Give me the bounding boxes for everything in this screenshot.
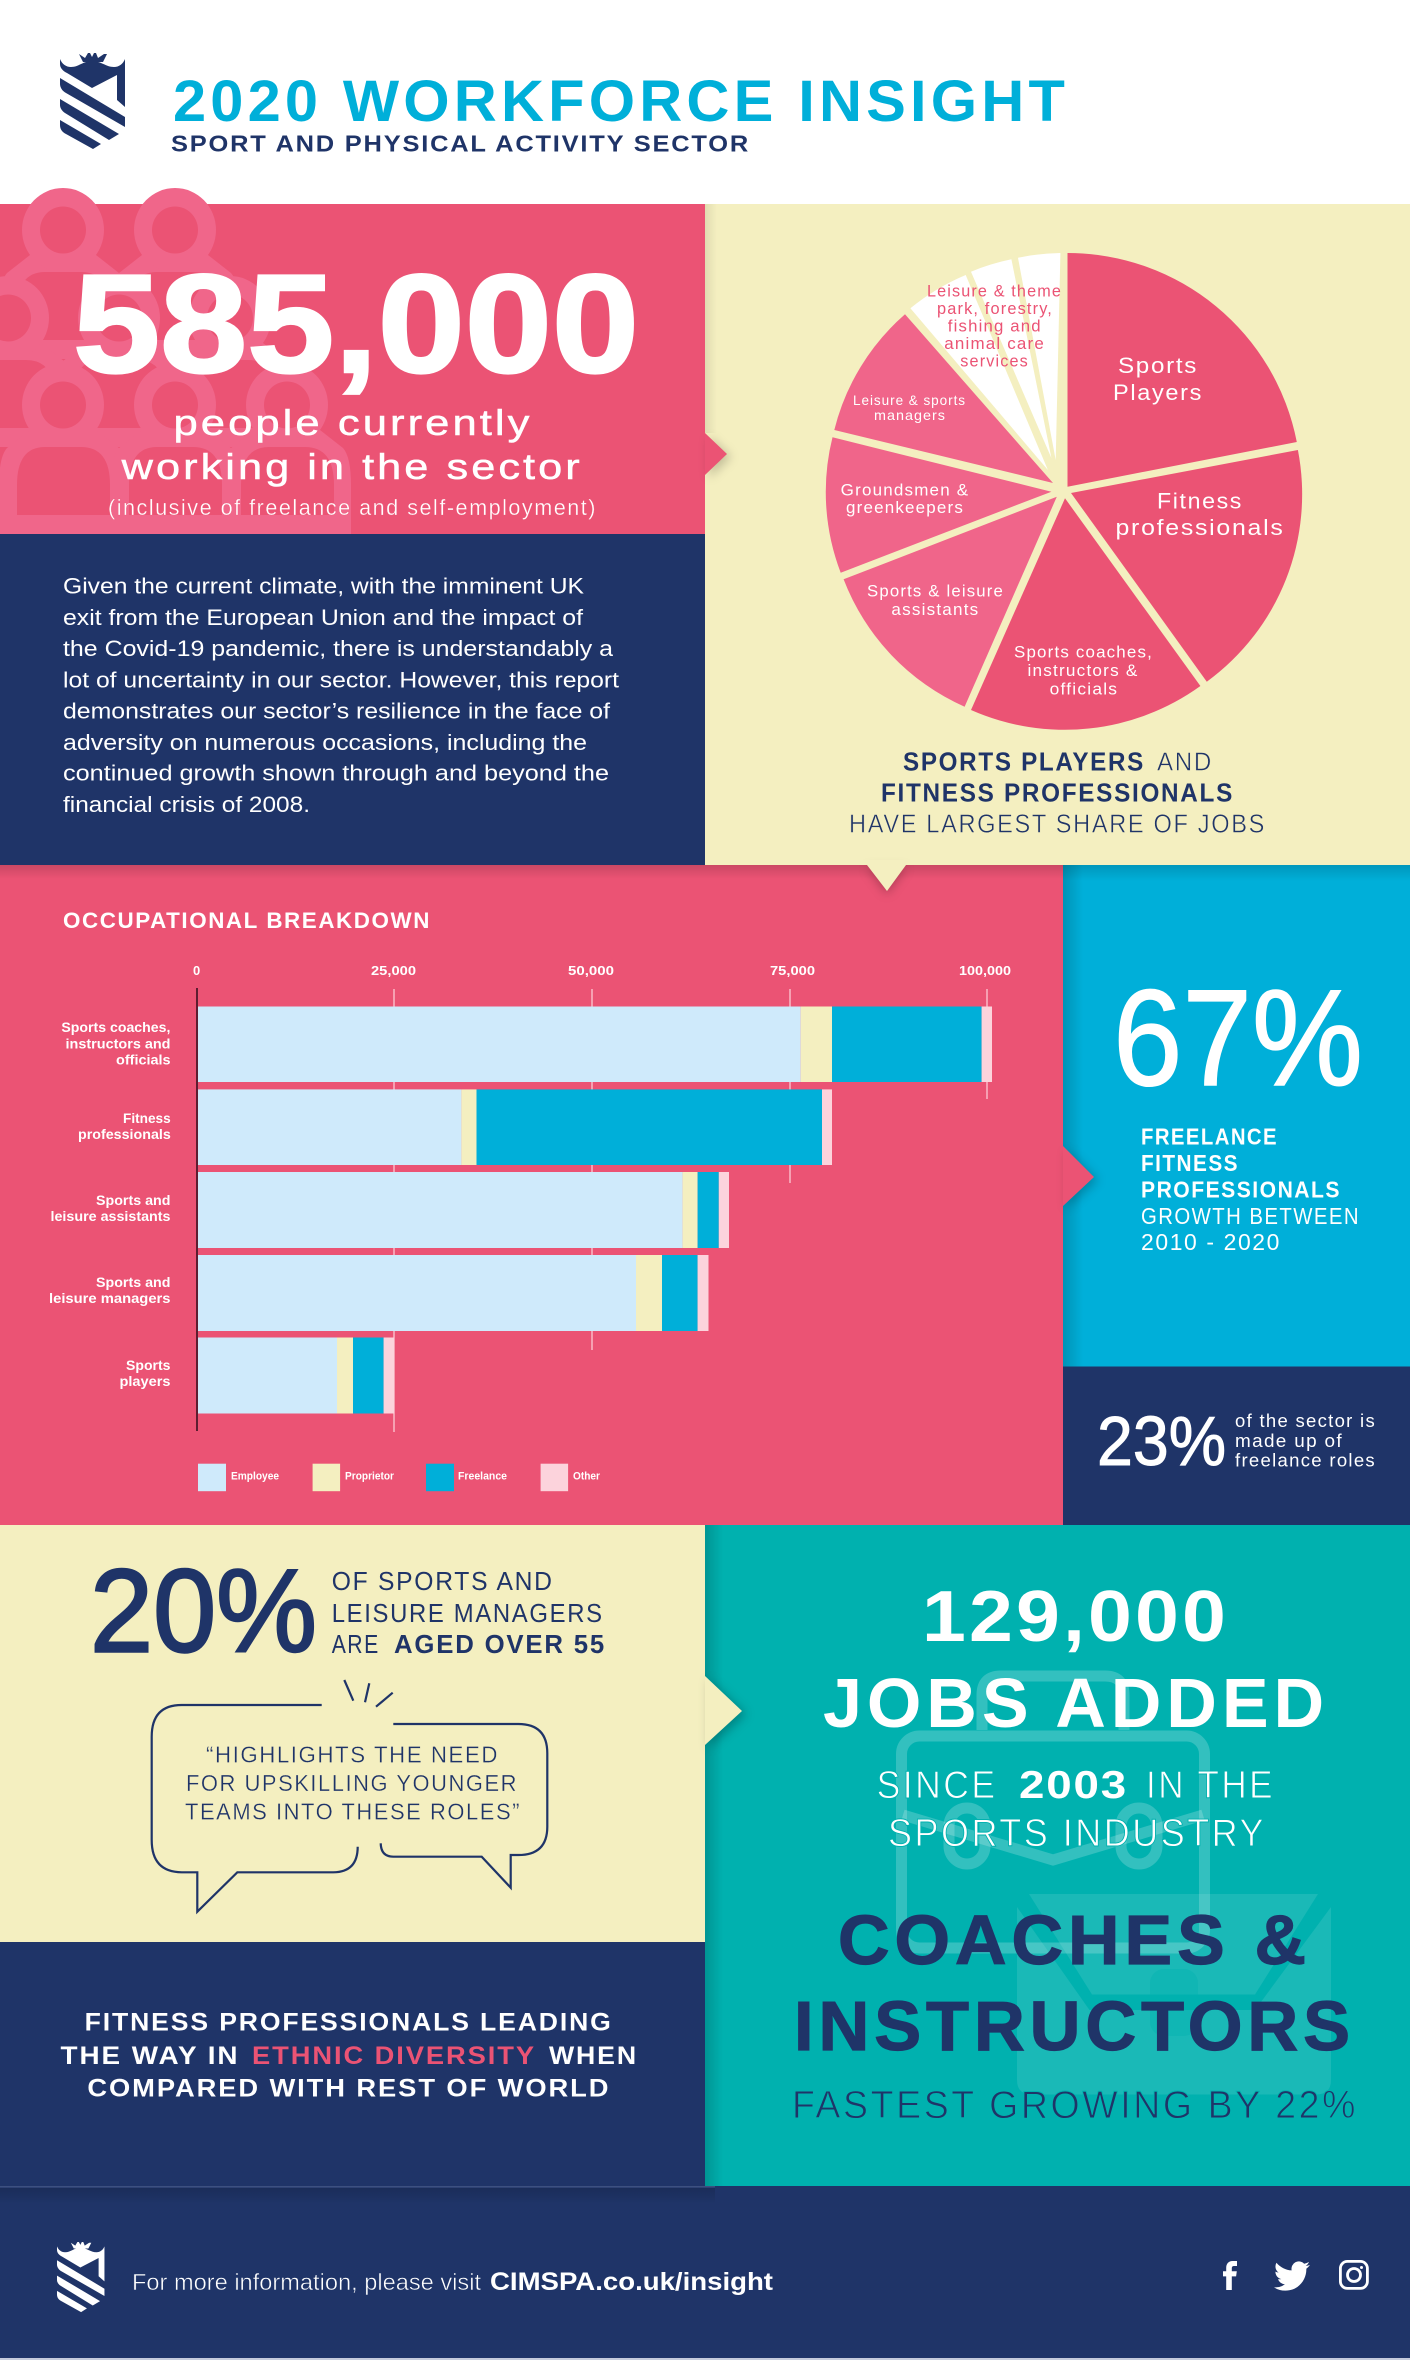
pie caption [849,747,1266,838]
pie label: groundsmen: greenkeepers [846,499,964,517]
bar: sports coaches [198,1006,992,1082]
pie label: sports players [1113,353,1203,405]
since 2003 text: SPORTS INDUSTRY [888,1812,1266,1855]
pie caption: HAVE LARGEST SHARE OF JOBS [849,808,1266,838]
diversity statement: COMPARED WITH REST OF WORLD [87,2075,610,2103]
legend: Proprietor [345,1471,395,1483]
footer text: CIMSPA.co.uk/insight [490,2268,774,2296]
row labels: Sports and [96,1274,170,1290]
pie label: sports coaches [1014,644,1153,698]
panel: freelance stats [1063,865,1410,1367]
intro paragraph: lot of uncertainty in our sector. However, this report [63,667,620,692]
title: 2020 WORKFORCE INSIGHT [173,69,1069,134]
intro paragraph: exit from the European Union and the impact of [63,605,584,630]
subtitle: SPORT AND PHYSICAL ACTIVITY SECTOR [171,130,750,156]
icon: twitter [1274,2261,1310,2291]
stat 23%: 23% [1097,1402,1226,1480]
pie label: leisure and theme park: park, forestry, [937,300,1053,318]
stat caption [1235,1411,1376,1471]
pie label: groundsmen: Groundsmen & [841,481,969,499]
diversity statement: FITNESS PROFESSIONALS LEADING [85,2009,613,2037]
arrow: cream to teal [705,1676,742,1745]
hero caption [120,402,583,487]
heading: coaches and instructors: COACHES & [838,1901,1311,1979]
row labels [49,1019,171,1389]
panel: 585,000 hero [0,188,727,534]
pie label: sports players: Sports [1118,353,1198,378]
icon: briefcase background [902,1676,1204,1948]
quote: “HIGHLIGHTS THE NEED [206,1742,499,1768]
intro paragraph: Given the current climate, with the imminent UK [63,573,584,598]
pie label: sports and leisure assistants: Sports & leisure [867,583,1004,601]
since 2003 text [877,1764,1275,1855]
since 2003 text: 2003 [1019,1764,1128,1807]
since 2003 text: IN THE [1146,1764,1275,1807]
pie label: sports players: Players [1113,380,1203,405]
row labels: instructors and [66,1036,170,1052]
legend [198,1464,601,1491]
panel: ethnic diversity [0,1942,705,2186]
bar: sports players [198,1338,394,1414]
stat caption: made up of [1235,1431,1343,1451]
bar: sports and leisure assistants [198,1172,729,1248]
pie label: leisure and theme park: animal care [944,335,1045,353]
hero caption: working in the sector [120,446,583,487]
managers text [332,1568,606,1659]
pie label: sports and leisure assistants: assistants [891,601,979,619]
pie label: leisure and theme park: services [960,353,1029,371]
legend: Employee [231,1471,279,1483]
heading: coaches and instructors: INSTRUCTORS [794,1987,1355,2065]
pie caption: FITNESS PROFESSIONALS [881,777,1234,807]
hero caption: people currently [174,402,532,443]
intro paragraph: continued growth shown through and beyond the [63,761,609,786]
big number 585,000: 585,000 [73,245,639,402]
freelance growth text: FITNESS [1141,1150,1239,1176]
panel: job share pie [705,204,1410,891]
logo: shield [60,53,125,149]
arrow: cream down to chart [867,865,906,891]
pie label: sports coaches: instructors & [1028,662,1138,680]
intro paragraph: financial crisis of 2008. [63,792,310,817]
icon: instagram [1340,2261,1367,2288]
row labels: professionals [78,1126,171,1142]
pie label: leisure and theme park: fishing and [948,317,1042,335]
panel: 23% freelance share [1063,1366,1410,1526]
bar chart [49,963,1011,1432]
header [0,0,1410,204]
diversity statement: WHEN [549,2042,638,2070]
panel: managers aged over 55 [0,1525,742,1942]
logo: white shield [57,2242,104,2312]
arrow: pink to freelance panel [1063,1146,1094,1206]
pie label: leisure and theme park [927,282,1062,371]
legend: Other [573,1471,601,1483]
pie chart [826,253,1302,730]
quote: FOR UPSKILLING YOUNGER [186,1770,518,1796]
hero note: (inclusive of freelance and self-employment) [108,495,597,520]
row labels: Sports [126,1357,171,1373]
icon: spark lines [344,1680,393,1707]
freelance growth text: FREELANCE [1141,1123,1278,1149]
pie label: leisure and sports managers [853,392,966,423]
footer [0,2186,1410,2360]
pie caption: AND [1157,747,1213,777]
big stat 67%: 67% [1113,962,1363,1115]
stat: 129,000: 129,000 [922,1577,1229,1657]
quote: TEAMS INTO THESE ROLES” [185,1798,521,1824]
freelance growth text: PROFESSIONALS [1141,1176,1341,1202]
legend: Freelance [458,1471,507,1483]
pie label: sports coaches: Sports coaches, [1014,644,1153,662]
panel: introduction [0,534,705,865]
stat caption: freelance roles [1235,1451,1376,1471]
freelance growth text [1141,1123,1360,1255]
stat 20%: 20% [90,1546,317,1678]
pie label: leisure and sports managers: Leisure & sports [853,392,966,408]
row labels: leisure managers [49,1290,171,1306]
footer text: For more information, please visit [132,2269,481,2295]
x axis labels [193,963,1011,978]
heading: coaches and instructors [794,1901,1355,2065]
pie label: groundsmen [841,481,969,517]
row labels: Fitness [123,1110,171,1126]
x axis labels: 25,000 [371,963,416,978]
stat: jobs added: JOBS ADDED [823,1664,1329,1742]
diversity statement [60,2009,638,2103]
pie label: sports coaches: officials [1050,680,1118,698]
pie caption: SPORTS PLAYERS [903,747,1145,777]
intro paragraph: the Covid-19 pandemic, there is understandably a [63,636,614,661]
pie label: fitness professionals: professionals [1116,515,1284,540]
pie label: leisure and theme park: Leisure & theme [927,282,1062,300]
pie label: fitness professionals: Fitness [1157,489,1243,514]
intro paragraph: demonstrates our sector’s resilience in the face of [63,698,611,723]
footer text [132,2268,774,2296]
since 2003 text: SINCE [877,1764,998,1807]
x axis labels: 0 [193,963,200,978]
bar: fitness professionals [198,1089,832,1165]
managers text: OF SPORTS AND [332,1568,554,1596]
icon: people background [0,188,351,534]
freelance growth text: GROWTH BETWEEN [1141,1203,1360,1229]
panel: jobs added [705,1525,1410,2186]
x axis labels: 100,000 [959,963,1011,978]
quote [185,1742,521,1824]
x axis labels: 50,000 [568,963,614,978]
bar: sports and leisure managers [198,1255,708,1331]
icon: bag background [1017,1894,1331,2094]
row labels: players [120,1373,171,1389]
diversity statement: THE WAY IN [60,2042,240,2070]
row labels: leisure assistants [50,1208,171,1224]
managers text: AGED OVER 55 [394,1631,606,1659]
x axis labels: 75,000 [770,963,815,978]
pie label: fitness professionals [1116,489,1284,540]
stat caption: of the sector is [1235,1411,1376,1431]
icon: facebook [1223,2261,1237,2290]
intro paragraph: adversity on numerous occasions, including the [63,730,587,755]
row labels: Sports and [96,1192,170,1208]
diversity statement: ETHNIC DIVERSITY [252,2042,536,2070]
panel: occupational breakdown [0,865,1094,1525]
row labels: Sports coaches, [61,1019,170,1035]
pie label: leisure and sports managers: managers [874,407,946,423]
chart heading: OCCUPATIONAL BREAKDOWN [63,908,431,933]
pie label: sports and leisure assistants [867,583,1004,619]
intro paragraph [63,573,620,817]
freelance growth text: 2010 - 2020 [1141,1229,1281,1255]
fastest growing text: FASTEST GROWING BY 22% [792,2084,1358,2127]
managers text: ARE [332,1631,380,1659]
icon: left speech bubble [152,1705,358,1912]
managers text: LEISURE MANAGERS [332,1600,604,1628]
row labels: officials [116,1052,171,1068]
arrow: hero to pie [705,433,727,475]
icon: right speech bubble [381,1724,547,1888]
